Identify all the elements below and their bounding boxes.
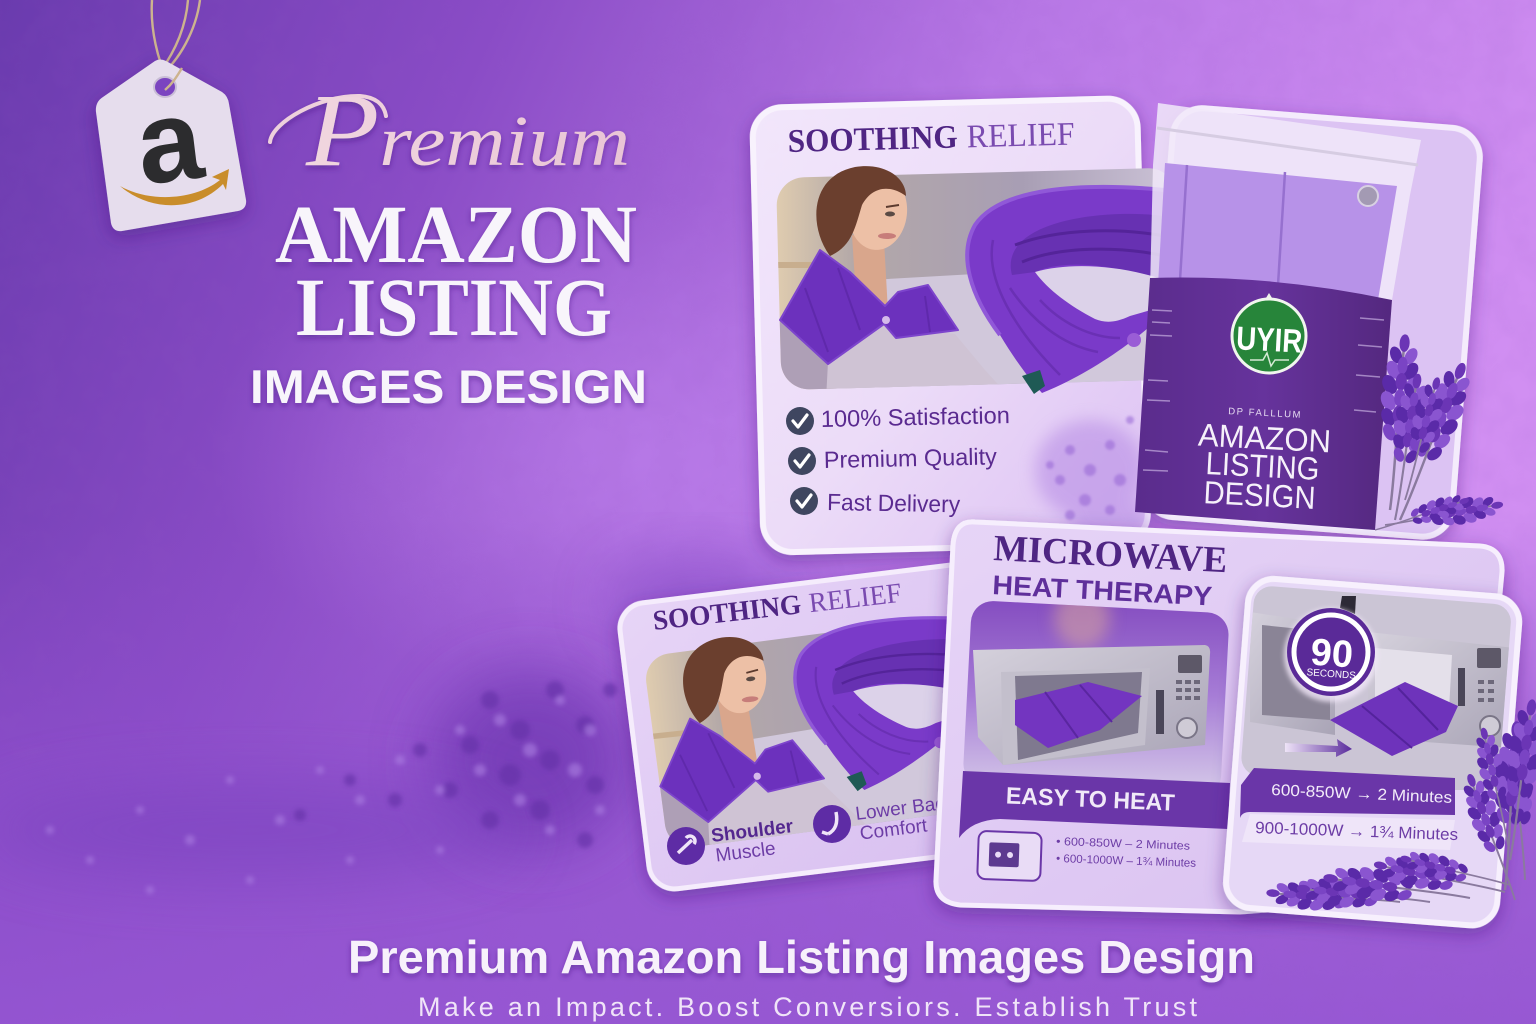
heading: soothing relief: RELIEF (966, 116, 1075, 155)
lavender sprigs foreground (1265, 697, 1536, 919)
product: wrap (792, 616, 969, 794)
panel: 90 seconds card (1224, 570, 1530, 927)
title: LISTING: LISTING (296, 261, 612, 353)
wattage text 1: 600-850W → 2 Minutes (1271, 782, 1452, 807)
photo: woman (636, 605, 1043, 861)
90 seconds timer: SECONDS (1306, 667, 1357, 682)
bag text: DP FALLLUM (1228, 406, 1302, 421)
feature list: Premium Quality (824, 443, 997, 473)
amazon a: a (129, 72, 211, 209)
wattage notes: • 600-1000W – 1¾ Minutes (1056, 853, 1196, 870)
heading (651, 578, 903, 637)
heading: soothing relief (787, 116, 1075, 160)
title: AMAZON: AMAZON (275, 188, 637, 280)
label: lower back comfort (854, 792, 958, 845)
arrow (1285, 739, 1352, 757)
product: neck wrap (967, 187, 1165, 394)
hang tag with Amazon logo (96, 0, 246, 231)
panel: back card behind bag (1143, 106, 1482, 539)
microwave icon (977, 831, 1042, 881)
UYIR logo: UYIR (1235, 319, 1303, 360)
wattage notes (1056, 836, 1196, 870)
feature list: 100% Satisfaction (821, 402, 1010, 432)
heading: RELIEF (807, 578, 903, 619)
product bag: LISTING (1205, 445, 1320, 487)
blurred lavender field (0, 560, 790, 894)
label: lower back comfort: Comfort (859, 815, 929, 845)
lavender sprigs near bag (1368, 332, 1506, 542)
shoulder muscle icon (667, 827, 705, 865)
photo: woman wearing wrap (770, 165, 1190, 400)
microwave photo (964, 601, 1228, 782)
wattage band (1240, 768, 1455, 818)
wattage text 2: 900-1000W → 1¾ Minutes (1255, 819, 1458, 844)
title: Premium: Premium (305, 73, 630, 188)
heading: microwave: MICROWAVE (993, 528, 1228, 581)
heading: SOOTHING (651, 589, 803, 637)
product bag: AMAZON (1197, 417, 1332, 459)
footer headline: Premium Amazon Listing Images Design (348, 931, 1255, 983)
blurred lavender in card (1035, 416, 1150, 542)
wattage notes: • 600-850W – 2 Minutes (1056, 836, 1190, 853)
product bag: DESIGN (1203, 474, 1316, 516)
heading: heat therapy: HEAT THERAPY (992, 570, 1213, 612)
title: IMAGES DESIGN: IMAGES DESIGN (250, 360, 647, 413)
heading: soothing relief: SOOTHING (787, 120, 958, 160)
feature list (786, 402, 1010, 517)
panel: microwave heat therapy card (936, 522, 1502, 912)
panel: small soothing relief card (617, 562, 1043, 892)
label: lower back comfort: Lower Back (854, 792, 956, 825)
UYIR logo (1232, 293, 1306, 373)
90 seconds timer: 90 (1309, 632, 1354, 676)
pale wattage strip (1242, 814, 1455, 850)
purple label band (1135, 277, 1392, 530)
open microwave photo (1242, 586, 1511, 790)
label: shoulder muscle (710, 816, 797, 867)
label: easy to heat: EASY TO HEAT (1005, 782, 1176, 816)
lower back icon (813, 805, 851, 843)
product bag (1135, 103, 1421, 530)
easy to heat band (959, 771, 1230, 838)
feature list: Fast Delivery (827, 489, 961, 517)
label: shoulder muscle: Muscle (714, 838, 777, 867)
footer tagline: Make an Impact. Boost Conversiors. Establish Trust (418, 992, 1197, 1022)
90 seconds timer (1284, 596, 1378, 702)
label: shoulder muscle: Shoulder (710, 816, 795, 847)
fleece contents (1158, 163, 1397, 300)
amazon smile (120, 169, 229, 205)
panel: soothing relief card (752, 98, 1190, 553)
